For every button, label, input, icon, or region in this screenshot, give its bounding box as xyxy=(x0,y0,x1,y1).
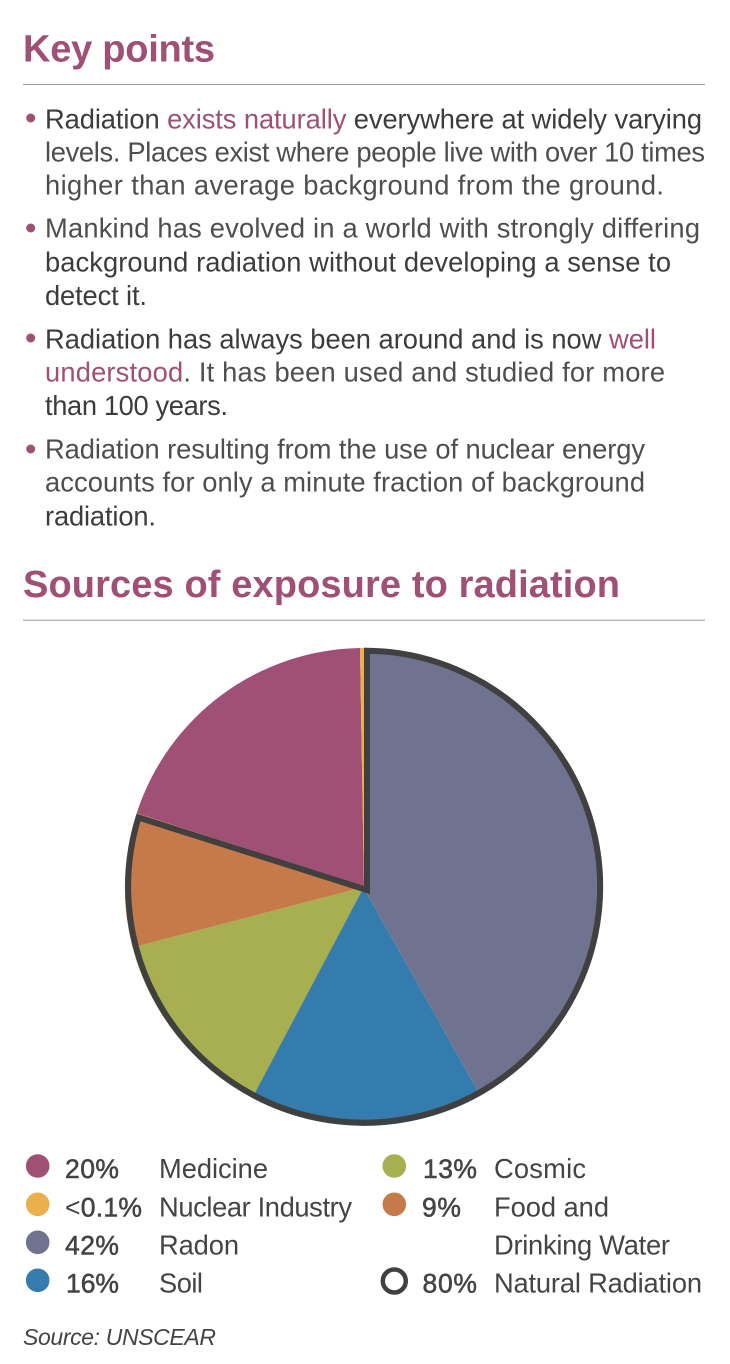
legend item: medicine: 20% xyxy=(65,1154,119,1184)
legend item: cosmic: Cosmic xyxy=(494,1153,586,1184)
legend item: radon: 42% xyxy=(65,1230,119,1260)
bullet point 1 xyxy=(26,104,705,200)
slice: soil 16% xyxy=(252,887,480,1126)
slice: radon 42% xyxy=(364,648,603,1096)
slice: medicine 20% xyxy=(137,648,364,887)
legend item: food and drinking water: Drinking Water xyxy=(494,1230,670,1260)
heading: sources of exposure to radiation: Sources of exposure to radiation xyxy=(23,564,620,606)
bullet point 2: detect it. xyxy=(45,280,147,311)
legend item: cosmic xyxy=(382,1153,586,1184)
legend item: food and drinking water xyxy=(382,1192,670,1260)
bullet point 4: Radiation resulting from the use of nuclear energy xyxy=(45,434,645,464)
slice: nuclear industry xyxy=(360,648,366,887)
bullet point 4: accounts for only a minute fraction of background xyxy=(45,466,645,498)
bullet point 1: Radiation exists naturally everywhere at widely varying xyxy=(45,104,702,134)
legend item: natural radiation xyxy=(383,1268,702,1298)
legend item: medicine: Medicine xyxy=(159,1153,268,1184)
natural radiation outline 80% xyxy=(128,651,600,1123)
legend xyxy=(26,1153,702,1298)
bullet point 3: than 100 years. xyxy=(45,390,228,421)
legend item: nuclear industry: <0.1% xyxy=(65,1192,142,1222)
bullet point 3: understood. It has been used and studied for more xyxy=(45,356,665,388)
legend item: soil xyxy=(26,1268,203,1298)
pie chart xyxy=(125,648,603,1126)
legend item: radon: Radon xyxy=(159,1230,239,1260)
legend item: cosmic: 13% xyxy=(423,1154,477,1184)
bullet point 2: Mankind has evolved in a world with strongly differing xyxy=(45,212,700,244)
legend item: food and drinking water: Food and xyxy=(494,1192,609,1222)
legend item: radon xyxy=(26,1230,239,1260)
legend item: soil: Soil xyxy=(159,1268,203,1298)
bullet point 4 xyxy=(26,434,645,532)
slice: cosmic 13% xyxy=(132,887,364,1098)
bullet point 2: background radiation without developing a sense to xyxy=(45,246,671,278)
bullet point 1: higher than average background from the ground. xyxy=(45,170,664,200)
legend item: medicine xyxy=(26,1153,268,1184)
bullet point 1: levels. Places exist where people live with over 10 times xyxy=(45,136,705,168)
legend item: food and drinking water: 9% xyxy=(422,1192,461,1222)
slice: food and drinking water 9% xyxy=(125,813,364,947)
legend item: nuclear industry: Nuclear Industry xyxy=(159,1192,352,1222)
bullet point 4: radiation. xyxy=(45,500,156,532)
heading: key points: Key points xyxy=(23,28,215,70)
legend item: soil: 16% xyxy=(66,1268,119,1298)
legend item: natural radiation: Natural Radiation xyxy=(494,1268,702,1298)
source note: Source: UNSCEAR xyxy=(23,1324,216,1350)
panel: key points list xyxy=(26,104,705,532)
bullet point 3 xyxy=(26,324,665,421)
legend item: natural radiation: 80% xyxy=(422,1268,477,1298)
bullet point 3: Radiation has always been around and is now well xyxy=(45,324,656,354)
legend item: nuclear industry xyxy=(26,1192,352,1222)
bullet point 2 xyxy=(26,212,700,311)
